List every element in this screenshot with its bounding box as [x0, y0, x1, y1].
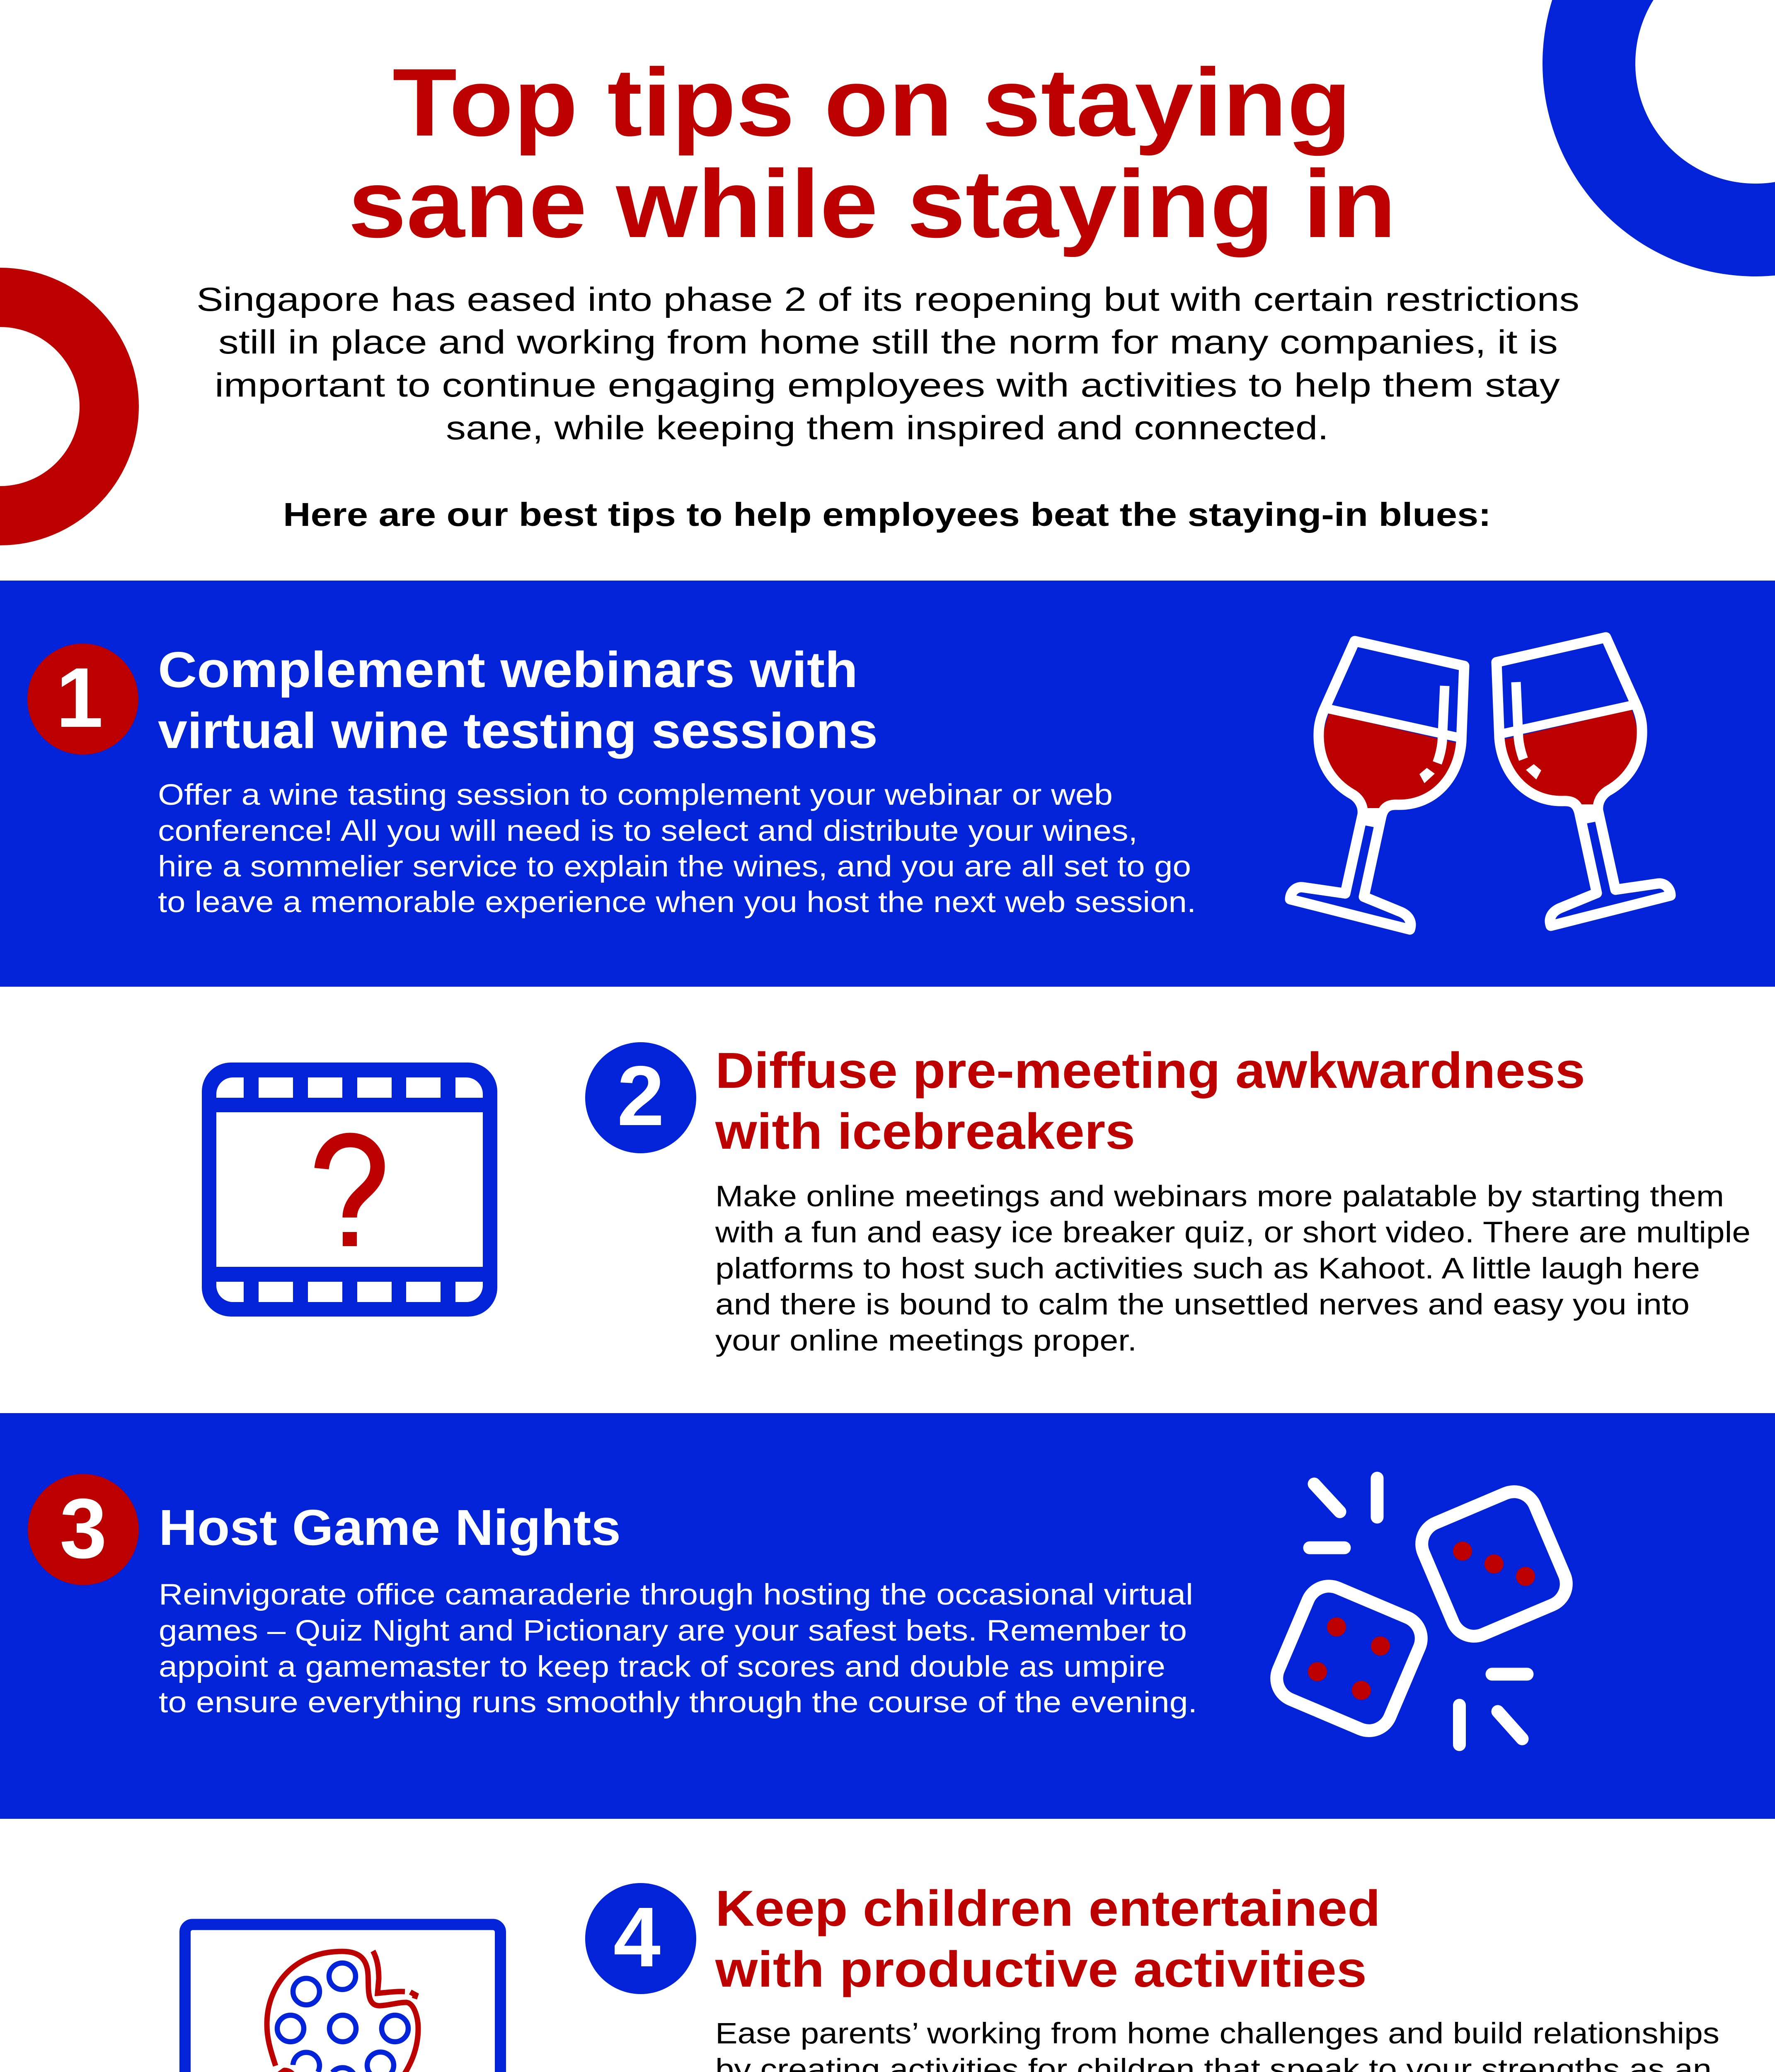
- tip 2 number badge: [585, 1042, 696, 1153]
- tip 3 body text: [159, 1578, 1197, 1719]
- tip 1 number badge: 1: [56, 650, 103, 745]
- tip 2 body text: your online meetings proper.: [715, 1324, 1137, 1357]
- decorative ring: top right: [1543, 0, 1775, 276]
- tip 1 heading: virtual wine testing sessions: [158, 702, 878, 759]
- intro text: Singapore has eased into phase 2 of its reopening but with certain restrictions: [196, 281, 1579, 318]
- tip 1 number badge: [27, 644, 138, 755]
- title: sane while staying in: [348, 150, 1396, 258]
- tip 3 background: [0, 1413, 1775, 1819]
- tip 2 body text: with a fun and easy ice breaker quiz, or short video. There are multiple: [715, 1216, 1751, 1249]
- tip 4 body text: Ease parents’ working from home challenges and build relationships: [715, 2017, 1719, 2050]
- tip 2 body text: Make online meetings and webinars more palatable by starting them: [715, 1180, 1724, 1213]
- tip 4 heading: [715, 1880, 1380, 1997]
- tip 2 heading: Diffuse pre-meeting awkwardness: [715, 1042, 1585, 1099]
- title: [348, 49, 1396, 258]
- tip 2 body text: platforms to host such activities such as Kahoot. A little laugh here: [715, 1252, 1700, 1285]
- tip 3 body text: to ensure everything runs smoothly through the course of the evening.: [159, 1686, 1197, 1719]
- tip 4 number badge: [585, 1883, 696, 1994]
- tip 1 body text: to leave a memorable experience when you host the next web session.: [158, 886, 1196, 919]
- tip 2 number badge: 2: [617, 1048, 664, 1143]
- lead-in sentence: Here are our best tips to help employees beat the staying-in blues:: [283, 496, 1491, 533]
- intro text: [196, 281, 1579, 447]
- tip 2 heading: with icebreakers: [715, 1103, 1135, 1159]
- tip 1 body text: [158, 779, 1196, 919]
- intro text: sane, while keeping them inspired and connected.: [446, 409, 1329, 447]
- panel: tip 4 children activities: [142, 1880, 1719, 2072]
- icon: wine glasses: [1290, 637, 1671, 929]
- tip 4 body text: [715, 2017, 1719, 2072]
- tip 3 body text: games – Quiz Night and Pictionary are your safest bets. Remember to: [159, 1615, 1187, 1647]
- tip 1 heading: [158, 641, 878, 759]
- tip 3 number badge: [28, 1474, 139, 1585]
- icon: film strip with question mark: [202, 1063, 497, 1317]
- tip 1 body text: hire a sommelier service to explain the wines, and you are all set to go: [158, 850, 1191, 883]
- panel: tip 2 icebreakers: [202, 1042, 1751, 1357]
- tip 2 body text: [715, 1180, 1751, 1357]
- tip 2 heading: [715, 1042, 1585, 1159]
- intro text: important to continue engaging employees with activities to help them stay: [215, 367, 1560, 404]
- tip 4 heading: with productive activities: [715, 1941, 1367, 1997]
- tip 4 number badge: 4: [613, 1890, 661, 1985]
- tip 1 background: [0, 581, 1775, 987]
- decorative ring: left: [0, 268, 139, 545]
- panel: tip 1 wine tasting: [0, 581, 1775, 987]
- title: Top tips on staying: [392, 49, 1351, 156]
- tip 4 heading: Keep children entertained: [715, 1880, 1380, 1936]
- panel: tip 3 game nights: [0, 1413, 1775, 1819]
- tip 1 body text: conference! All you will need is to select and distribute your wines,: [158, 815, 1138, 847]
- tip 2 body text: and there is bound to calm the unsettled nerves and easy you into: [715, 1288, 1690, 1321]
- tip 3 number badge: 3: [60, 1481, 107, 1576]
- tip 3 body text: appoint a gamemaster to keep track of scores and double as umpire: [159, 1651, 1165, 1683]
- tip 1 heading: Complement webinars with: [158, 641, 858, 698]
- intro text: still in place and working from home still the norm for many companies, it is: [218, 324, 1558, 361]
- icon: laptop with palette: [142, 1924, 543, 2072]
- tip 3 heading: Host Game Nights: [159, 1499, 621, 1556]
- tip 1 body text: Offer a wine tasting session to complement your webinar or web: [158, 779, 1113, 811]
- tip 3 body text: Reinvigorate office camaraderie through hosting the occasional virtual: [159, 1578, 1193, 1611]
- icon: dice: [1270, 1478, 1573, 1745]
